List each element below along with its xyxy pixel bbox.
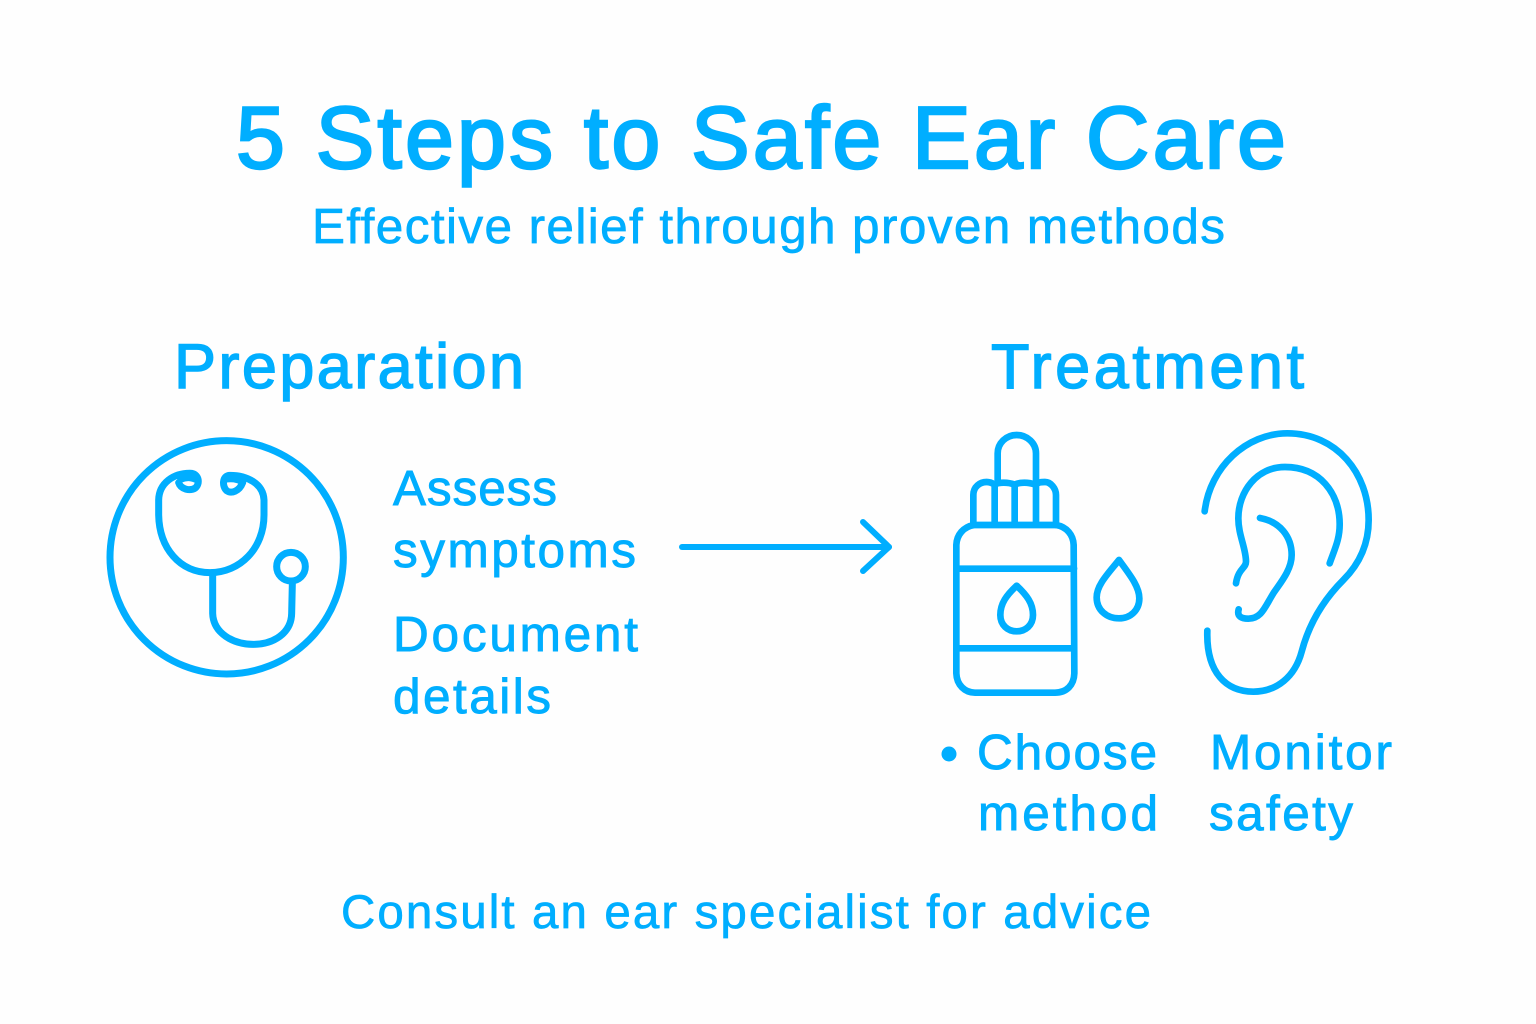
bullet [942, 746, 956, 762]
footer note: Consult an ear specialist for advice [341, 886, 1151, 939]
text: preparation steps [393, 461, 638, 724]
text: preparation steps: details [393, 669, 551, 724]
title: 5 Steps to Safe Ear Care [236, 88, 1286, 187]
icon: stethoscope in circle [110, 441, 343, 674]
text: choose method: Choose [977, 725, 1157, 780]
arrow [682, 522, 889, 571]
heading: treatment: Treatment [991, 332, 1304, 402]
text: monitor safety: safety [1209, 786, 1353, 841]
text: monitor safety [1209, 725, 1392, 841]
icon: dropper bottle [956, 435, 1074, 693]
text: preparation steps: symptoms [393, 523, 636, 578]
subtitle: Effective relief through proven methods [312, 199, 1225, 254]
text: preparation steps: Assess [393, 461, 557, 516]
text: preparation steps: Document [393, 607, 638, 662]
icon: falling drop [1097, 560, 1139, 618]
icon: ear [1205, 433, 1369, 692]
text: choose method [977, 725, 1158, 841]
text: choose method: method [978, 786, 1158, 841]
heading: preparation: Preparation [174, 332, 524, 402]
text: monitor safety: Monitor [1210, 725, 1392, 780]
icon: drop on label [1000, 586, 1033, 631]
